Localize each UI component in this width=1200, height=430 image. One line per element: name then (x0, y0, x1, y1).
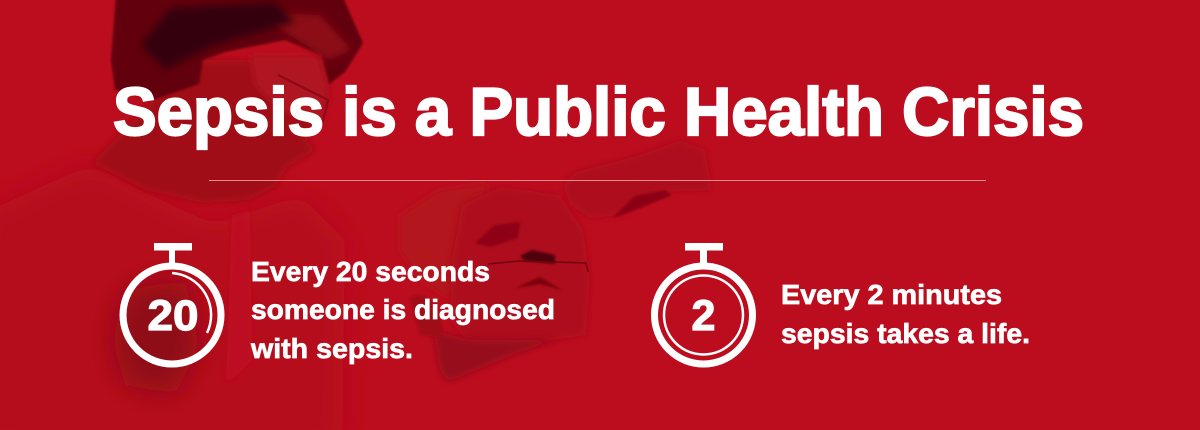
patient face (450, 187, 590, 345)
icon: stopwatch 2 (654, 243, 752, 364)
shirt shadow fold (112, 280, 200, 395)
patient nostrils (520, 250, 555, 264)
icon: stopwatch 20: 20 (148, 292, 198, 340)
title: Sepsis is a Public Health Crisis (113, 74, 1084, 150)
hand shadow (612, 190, 672, 218)
text: every 20 seconds: Every 20 seconds (251, 256, 490, 287)
photo: caregiver and patient, red duotone (0, 0, 712, 430)
patient hand (563, 140, 712, 218)
patient neck (433, 330, 560, 382)
caregiver shirt (0, 165, 345, 430)
caregiver hair highlight (255, 12, 352, 60)
caregiver dark hair core (140, 2, 295, 70)
divider line (209, 180, 986, 181)
text: every 20 seconds: someone is diagnosed (251, 294, 555, 325)
patient ear (410, 295, 442, 338)
patient eye shadows (475, 222, 520, 247)
patient hair (400, 183, 490, 300)
text: every 20 seconds (250, 256, 555, 364)
text: every 2 minutes: sepsis takes a life. (781, 318, 1030, 349)
caregiver hair (111, 0, 363, 100)
caregiver forehead (250, 55, 328, 125)
shirt light collar (226, 210, 252, 385)
caregiver face and neck (92, 60, 329, 203)
text: every 2 minutes: Every 2 minutes (781, 279, 1002, 310)
icon: stopwatch 2: 2 (692, 292, 715, 340)
icon: stopwatch 20 (123, 243, 221, 364)
text: every 2 minutes (781, 279, 1030, 349)
oxygen tube (488, 261, 588, 272)
patient mouth (515, 277, 562, 290)
text: every 20 seconds: with sepsis. (250, 333, 413, 364)
glasses (278, 75, 328, 125)
